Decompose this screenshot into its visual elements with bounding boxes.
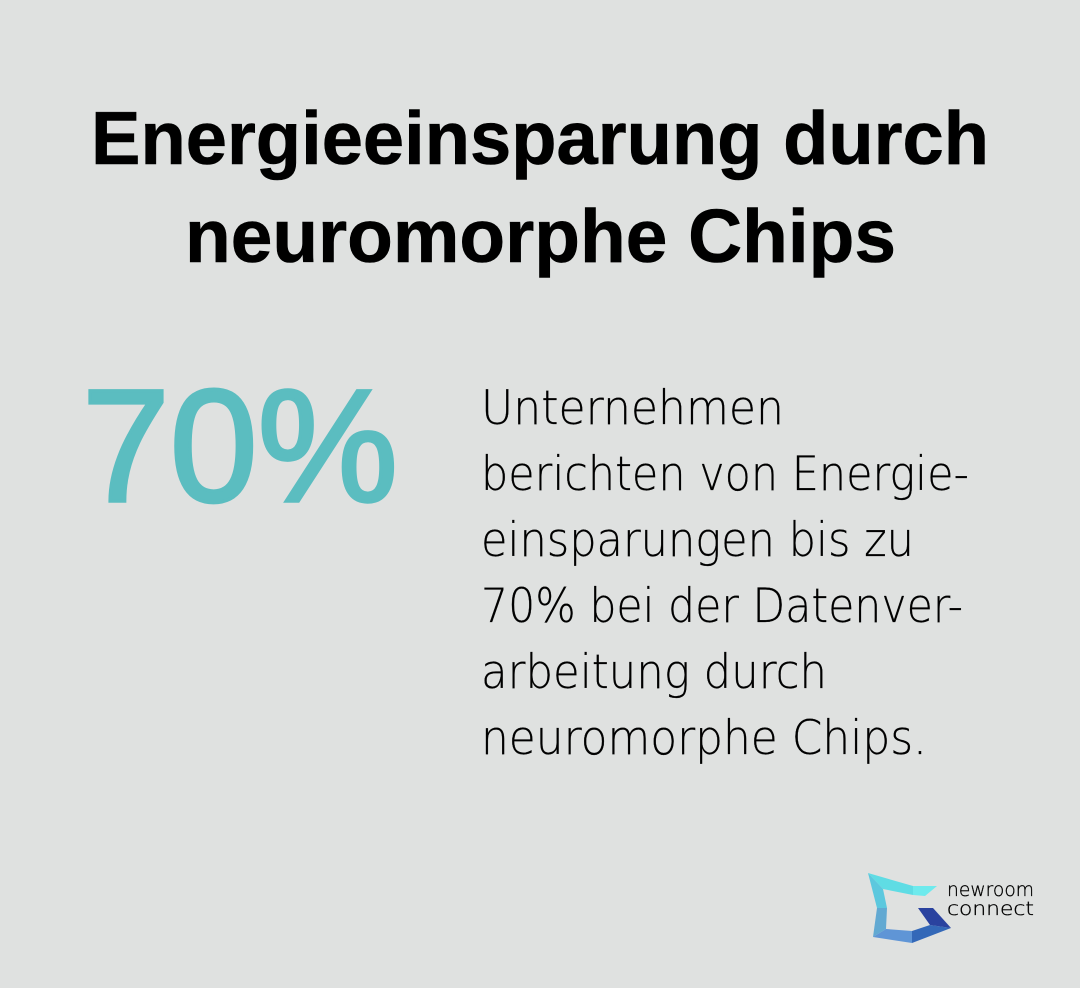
body text: einsparungen bis zu	[481, 513, 914, 568]
big number: 70%: 70%	[82, 356, 398, 535]
icon: logo mark	[868, 873, 951, 943]
body text: berichten von Energie-	[481, 447, 969, 502]
body text: Unternehmen	[481, 381, 784, 436]
logo wordmark: newroom	[947, 879, 1034, 901]
title: neuromorphe Chips	[185, 194, 896, 278]
body text: neuromorphe Chips.	[481, 711, 927, 766]
logo wordmark	[947, 879, 1034, 920]
title	[91, 96, 989, 278]
body text: arbeitung durch	[481, 645, 827, 700]
body text	[481, 381, 969, 766]
body text: 70% bei der Datenver-	[481, 579, 963, 634]
logo wordmark: connect	[947, 898, 1034, 920]
title: Energieeinsparung durch	[91, 96, 989, 180]
logo: newroom connect	[868, 873, 1034, 943]
